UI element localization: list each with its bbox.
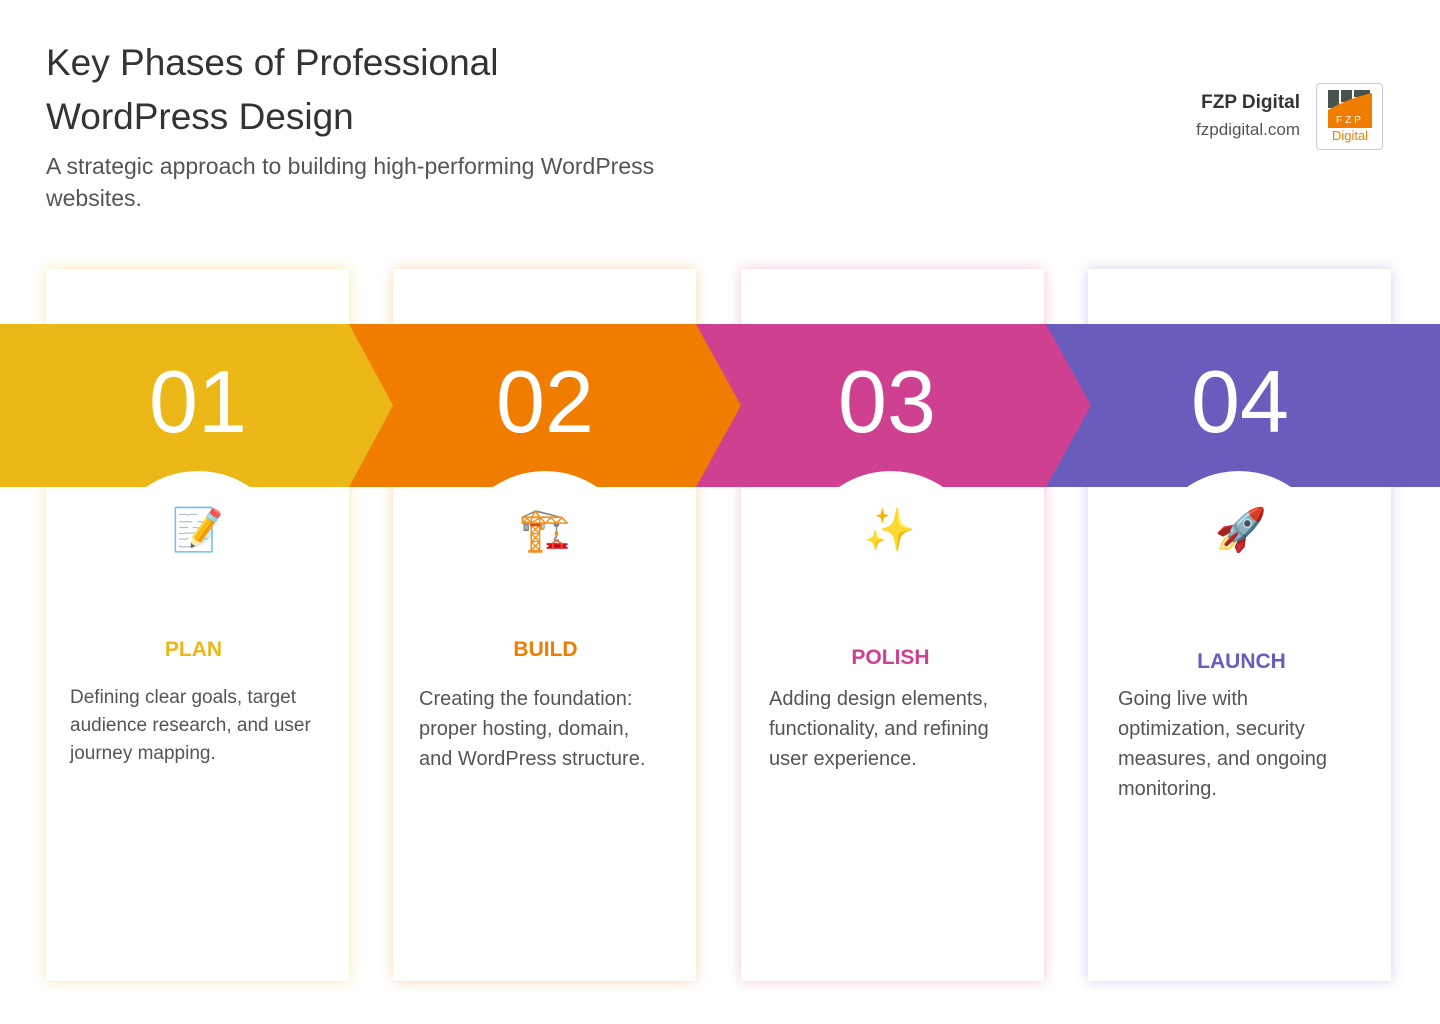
text 1: Defining clear goals, target audience research, and user journey mapping. [70, 687, 311, 764]
logo [1316, 83, 1383, 150]
numbers: 01 [149, 352, 247, 451]
text: 02 [496, 352, 594, 451]
card 3 [741, 269, 1044, 981]
logo: FZP [1336, 115, 1364, 126]
headings: PLAN [165, 638, 222, 661]
text 4: Going live with optimization, security measures, and ongoing monitoring. [1118, 688, 1327, 800]
card 4 [1088, 269, 1391, 981]
subtitle: A strategic approach to building high-performing WordPress websites. [46, 153, 654, 211]
card 1 [46, 269, 349, 981]
text: 04 [1191, 352, 1289, 451]
text: BUILD [513, 638, 578, 661]
text: 03 [838, 352, 936, 451]
title [46, 42, 498, 137]
title: Key Phases of Professional [46, 42, 498, 83]
icon: memo: 📝 [172, 505, 224, 554]
text: POLISH [851, 646, 930, 669]
text 3: Adding design elements, functionality, and refining user experience. [769, 688, 989, 770]
brand: FZP Digital [1201, 92, 1300, 113]
chevron band [0, 324, 1440, 487]
brand: fzpdigital.com [1196, 120, 1300, 139]
text 2: Creating the foundation: proper hosting, domain, and WordPress structure. [419, 688, 645, 770]
circles [106, 471, 290, 655]
brand [1196, 92, 1300, 139]
title: WordPress Design [46, 96, 354, 137]
text: LAUNCH [1197, 650, 1286, 673]
icon: crane: 🏗️ [519, 505, 571, 554]
icon: sparkles: ✨ [864, 505, 916, 554]
icon: rocket: 🚀 [1215, 505, 1267, 554]
logo: Digital [1332, 128, 1368, 143]
card 2 [393, 269, 696, 981]
